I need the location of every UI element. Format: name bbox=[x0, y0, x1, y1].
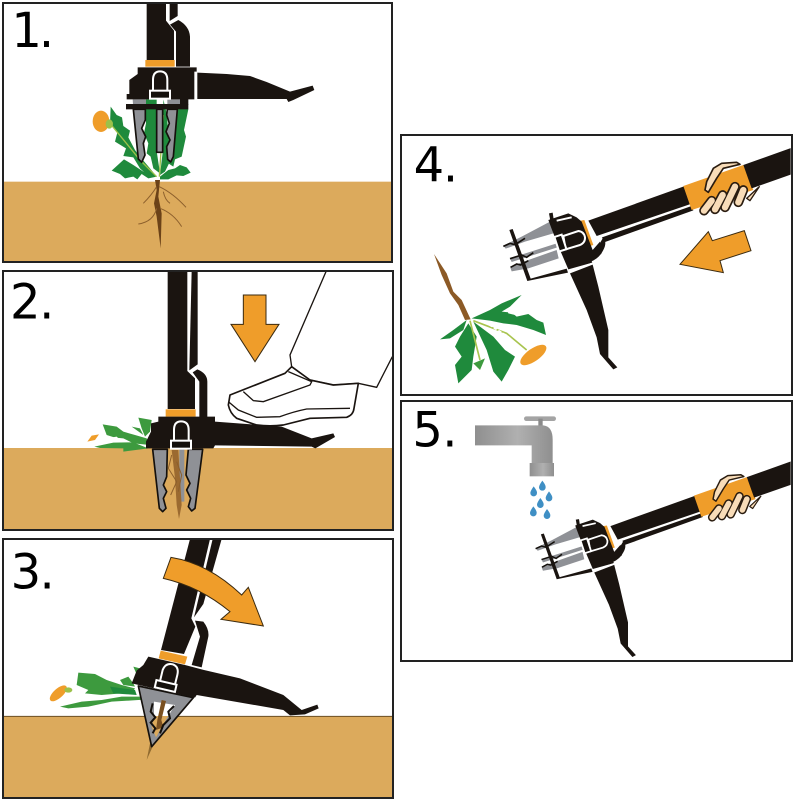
step number 4: 4. bbox=[414, 138, 457, 194]
frame bbox=[3, 3, 392, 262]
panel 2: step on foot plate bbox=[3, 271, 395, 530]
uprooted plant bbox=[47, 667, 175, 708]
arrow: tilt bbox=[163, 557, 263, 626]
soil bbox=[3, 182, 392, 262]
flattened plant bbox=[87, 418, 152, 452]
ejected plant bbox=[434, 254, 550, 383]
frame bbox=[401, 135, 792, 395]
weeder tool head bbox=[126, 3, 314, 162]
soil bbox=[3, 716, 392, 797]
claws with root bbox=[138, 686, 193, 760]
tool ejecting bbox=[503, 140, 800, 369]
leg and shoe bbox=[228, 271, 395, 426]
panel 1: position tool over weed bbox=[3, 3, 392, 262]
icon: faucet bbox=[475, 416, 556, 476]
frame bbox=[3, 271, 393, 530]
soil bbox=[3, 448, 392, 529]
dandelion plant bbox=[93, 99, 191, 248]
icon: water drops bbox=[530, 481, 552, 519]
frame bbox=[3, 539, 393, 798]
step number 5: 5. bbox=[412, 402, 457, 458]
panel 5: rinse tool bbox=[401, 401, 800, 661]
arrow: pull bbox=[680, 231, 751, 273]
frame bbox=[401, 401, 792, 661]
shaft, head and foot plate bbox=[146, 271, 335, 449]
tool held in hand bbox=[536, 455, 800, 657]
step number 2: 2. bbox=[10, 274, 53, 330]
tilted shaft and head bbox=[132, 539, 319, 715]
arrow: press down bbox=[231, 295, 279, 362]
panel 3: tilt tool back bbox=[3, 539, 393, 798]
panel 4: eject weed bbox=[401, 135, 800, 395]
claws in soil and root bbox=[153, 449, 203, 519]
step number 3: 3. bbox=[11, 545, 53, 601]
step number 1: 1. bbox=[11, 3, 51, 59]
